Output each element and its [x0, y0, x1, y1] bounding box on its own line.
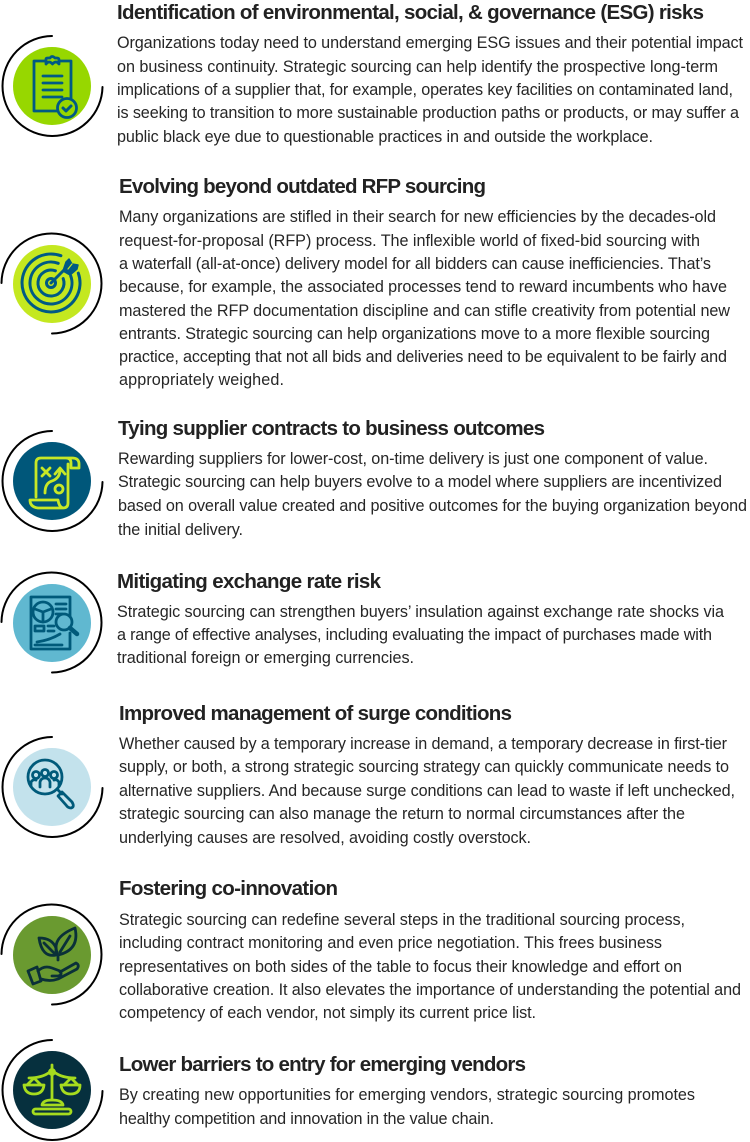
heading: Improved management of surge conditions [119, 702, 512, 725]
text block [118, 450, 747, 539]
panel: co-innovation [2, 877, 741, 1022]
panel: surge conditions [3, 702, 735, 847]
text block: the initial delivery. [118, 521, 243, 539]
panel: RFP sourcing [2, 175, 730, 389]
heading: Evolving beyond outdated RFP sourcing [119, 175, 486, 198]
panel: emerging vendors [3, 1040, 695, 1140]
heading: Identification of environmental, social, & governance (ESG) risks [117, 1, 704, 24]
text block: traditional foreign or emerging currencies. [117, 649, 414, 667]
text block: underlying causes are resolved, avoiding costly overstock. [119, 829, 531, 847]
icon: strategy scroll [3, 431, 102, 531]
panel: ESG risks [3, 1, 743, 146]
text block: on business continuity. Strategic sourcing can help identify the prospective long-term [117, 58, 718, 76]
text block: Rewarding suppliers for lower-cost, on-time delivery is just one component of value. [118, 450, 708, 468]
text block: alternative suppliers. And because surge conditions can lead to waste if left unchecked, [119, 782, 735, 800]
text block [117, 603, 724, 667]
icon: magnifier over people [3, 737, 102, 837]
icon: hand holding plant [2, 905, 101, 1004]
text block: a range of effective analyses, including evaluating the impact of purchases made with [117, 626, 712, 644]
text block: including contract monitoring and even price negotiation. This frees business [119, 934, 662, 952]
text block [119, 1086, 695, 1128]
text block: practice, accepting that not all bids and deliveries need to be equivalent to be fairly and [119, 348, 727, 366]
text block: collaborative creation. It also elevates the importance of understanding the potential and [119, 981, 741, 999]
text block: request-for-proposal (RFP) process. The inflexible world of fixed-bid sourcing with [119, 232, 700, 250]
text block: a waterfall (all-at-once) delivery model for all bidders can cause inefficiencies. That’s [119, 255, 711, 273]
text block [119, 911, 741, 1022]
heading: Fostering co-innovation [119, 877, 338, 900]
text block: Strategic sourcing can help buyers evolve to a model where suppliers are incentivized [118, 473, 722, 491]
text block: representatives on both sides of the table to focus their knowledge and effort on [119, 958, 682, 976]
text block: is seeking to transition to more sustainable production paths or products, or may suffer a [117, 104, 739, 122]
text block: implications of a supplier that, for example, operates key facilities on contaminated land, [117, 81, 733, 99]
text block [119, 735, 735, 847]
text block: supply, or both, a strong strategic sourcing strategy can quickly communicate needs to [119, 758, 729, 776]
text block: strategic sourcing can also manage the return to normal circumstances after the [119, 805, 685, 823]
text block: Whether caused by a temporary increase in demand, a temporary decrease in first-tier [119, 735, 728, 753]
text block: competency of each vendor, not simply its current price list. [119, 1004, 536, 1022]
icon: balance scales [3, 1040, 102, 1140]
text block: entrants. Strategic sourcing can help organizations move to a more flexible sourcing [119, 325, 710, 343]
text block: mastered the RFP documentation discipline and can stifle creativity from potential new [119, 302, 730, 320]
heading: Tying supplier contracts to business outcomes [118, 417, 545, 440]
text block [119, 208, 730, 389]
text block: By creating new opportunities for emerging vendors, strategic sourcing promotes [119, 1086, 695, 1104]
icon: clipboard with check [3, 36, 102, 136]
text block: public black eye due to questionable practices in and outside the workplace. [117, 128, 653, 146]
panel: supplier contracts [3, 417, 747, 539]
heading: Mitigating exchange rate risk [117, 570, 382, 593]
heading: Lower barriers to entry for emerging vendors [119, 1053, 526, 1076]
icon: target with arrow [2, 234, 101, 334]
text block: Strategic sourcing can redefine several steps in the traditional sourcing process, [119, 911, 685, 929]
panel: exchange rate risk [2, 570, 724, 672]
text block: healthy competition and innovation in the value chain. [119, 1110, 494, 1128]
text block: appropriately weighed. [119, 371, 284, 389]
icon: report with magnifier [2, 573, 101, 672]
text block: because, for example, the associated processes tend to reward incumbents who have [119, 278, 727, 296]
text block: based on overall value created and positive outcomes for the buying organization beyond [118, 497, 747, 515]
text block [117, 34, 744, 146]
text block: Organizations today need to understand emerging ESG issues and their potential impact [117, 34, 744, 52]
text block: Strategic sourcing can strengthen buyers’ insulation against exchange rate shocks via [117, 603, 724, 621]
text block: Many organizations are stifled in their search for new efficiencies by the decades-old [119, 208, 716, 226]
